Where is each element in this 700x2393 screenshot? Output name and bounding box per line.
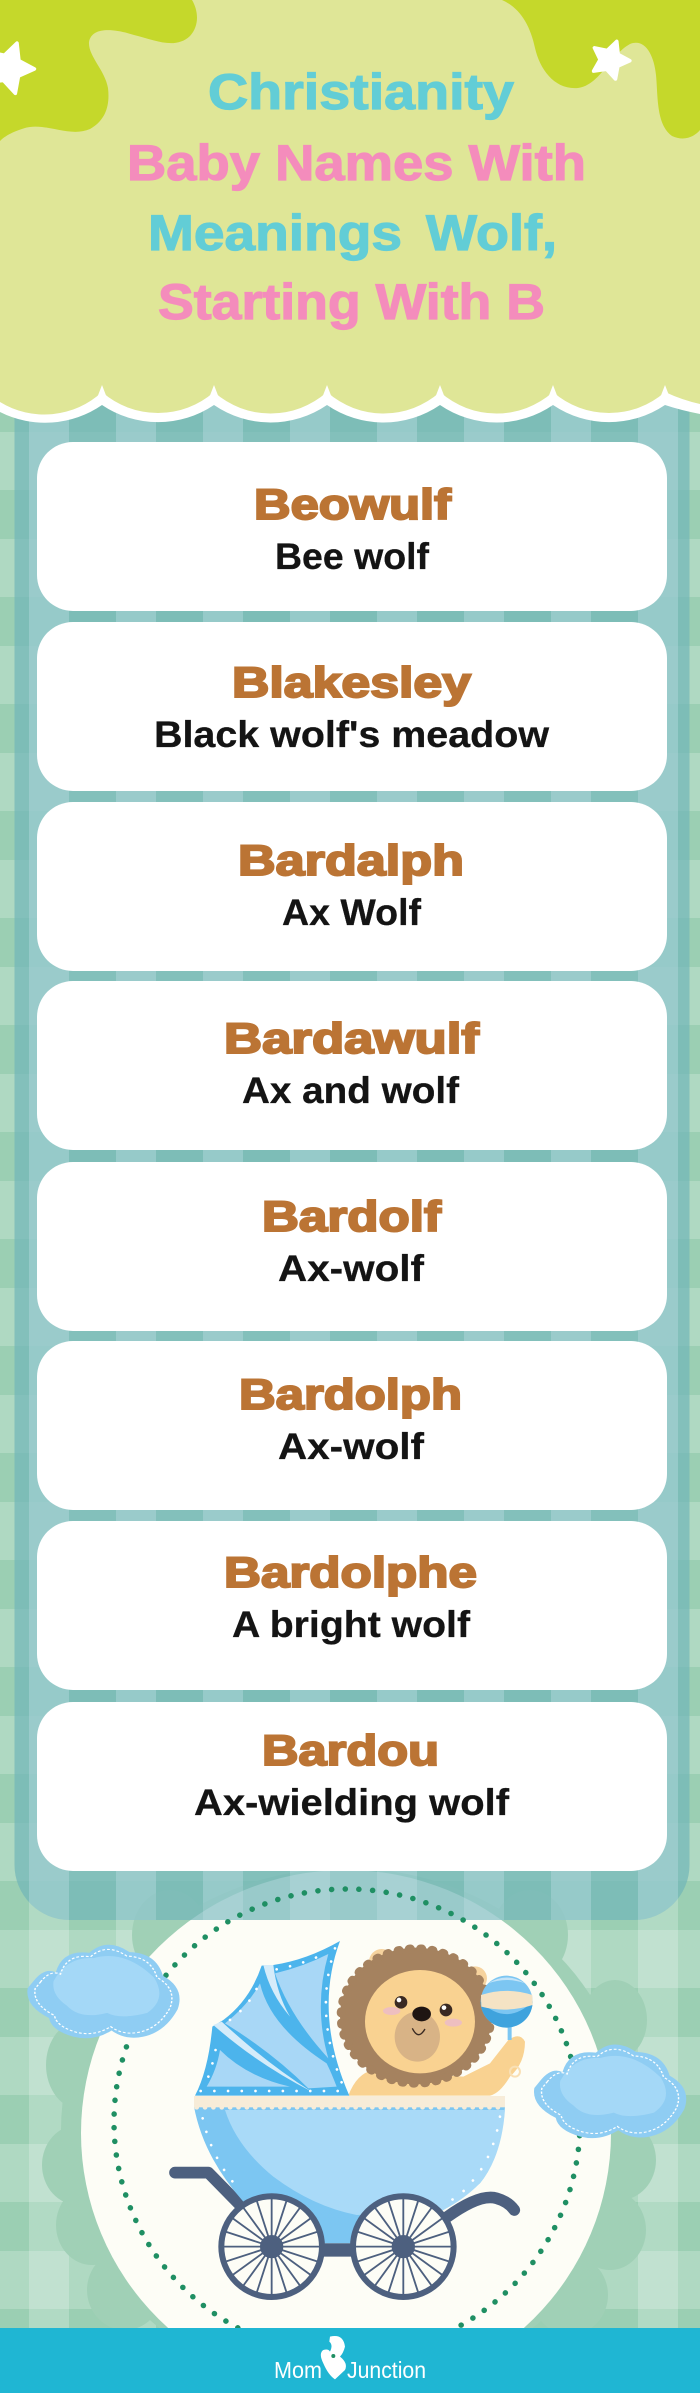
- icon: stroller body: [194, 2096, 505, 2243]
- icon: rattle: [481, 1976, 533, 2040]
- title: Wolf,: [426, 205, 557, 261]
- card: Bardolphe: Bardolphe: [224, 1549, 477, 1597]
- card: Blakesley: Black wolf's meadow: [154, 714, 549, 755]
- card: Beowulf: [37, 442, 667, 611]
- lime blob: top left: [0, 0, 197, 141]
- icon: right wheel: [353, 2196, 454, 2297]
- card: Bardolf: Ax-wolf: [278, 1248, 425, 1289]
- card: Bardalph: Bardalph: [238, 837, 464, 885]
- card: Beowulf: Bee wolf: [275, 536, 430, 577]
- footer: MomJunction logo bar: [0, 2328, 700, 2393]
- card: Bardou: [37, 1702, 667, 1871]
- icon: stroller hood: [195, 1941, 349, 2096]
- card: Bardolph: Ax-wolf: [278, 1426, 425, 1467]
- card: Beowulf: Beowulf: [254, 481, 452, 529]
- card: Blakesley: Blakesley: [232, 659, 471, 707]
- card: Bardawulf: [37, 981, 667, 1150]
- illustration: lion in baby stroller: [175, 1941, 533, 2297]
- card: Bardolf: Bardolf: [262, 1193, 442, 1241]
- icon: mother and child silhouette: [321, 2336, 346, 2379]
- card: Bardawulf: Bardawulf: [224, 1015, 480, 1063]
- illustration: clouds: [27, 1945, 686, 2138]
- icon: right star: [594, 41, 630, 79]
- card: Bardou: Ax-wielding wolf: [194, 1782, 510, 1823]
- dotted circle: [114, 1889, 580, 2355]
- title: Meanings: [148, 205, 402, 261]
- icon: lion: [340, 1948, 525, 2096]
- card: Bardolph: Bardolph: [239, 1371, 462, 1419]
- icon: left star: [0, 43, 34, 93]
- header: scalloped green banner with title: [0, 0, 700, 423]
- card: Bardolph: [37, 1341, 667, 1510]
- title: [127, 64, 586, 330]
- card: Bardalph: Ax Wolf: [282, 892, 422, 933]
- card: Blakesley: [37, 622, 667, 791]
- icon: right cloud: [534, 2045, 686, 2138]
- icon: axle: [323, 2243, 355, 2257]
- logo text: Junction: [347, 2357, 426, 2383]
- card: Bardolphe: A bright wolf: [232, 1604, 471, 1645]
- card: Bardalph: [37, 802, 667, 971]
- title: Christianity: [208, 64, 514, 120]
- logo text: Mom: [274, 2357, 322, 2383]
- card: Bardolf: [37, 1162, 667, 1331]
- card: Bardolphe: [37, 1521, 667, 1690]
- title: Starting With B: [158, 274, 545, 330]
- title: Baby Names With: [127, 135, 586, 191]
- panel: translucent teal backing: [14, 300, 690, 1920]
- logo text: [274, 2357, 426, 2383]
- card: Bardou: Bardou: [262, 1727, 439, 1775]
- icon: left wheel: [221, 2196, 322, 2297]
- icon: left cloud: [27, 1945, 180, 2038]
- icon: stroller handle and frame: [175, 2173, 514, 2217]
- illustration backdrop: scalloped green blob and white circle: [42, 1868, 656, 2393]
- card: Bardawulf: Ax and wolf: [242, 1070, 460, 1111]
- lime blob: top right: [502, 0, 700, 138]
